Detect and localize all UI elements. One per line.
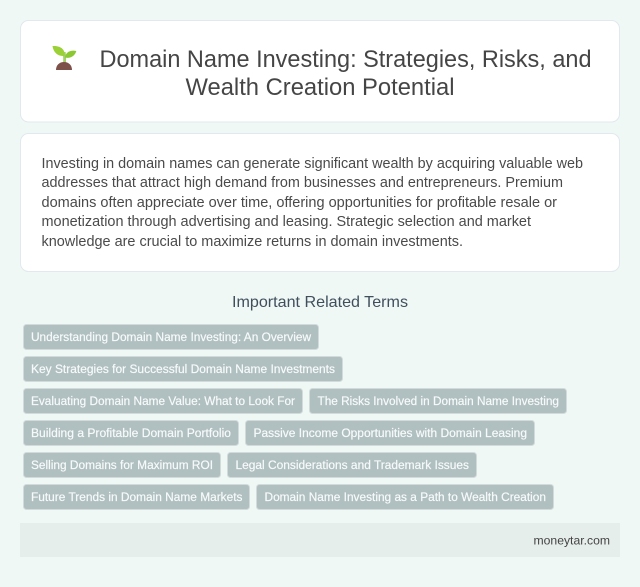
tag: [24, 356, 342, 382]
panel: title card: [20, 20, 620, 122]
tag: [228, 452, 476, 478]
tag list: [24, 324, 566, 510]
tag: Evaluating Domain Name Value: What to Look For: [31, 394, 295, 408]
footer source text: moneytar.com: [534, 534, 610, 548]
tag: Future Trends in Domain Name Markets: [31, 490, 242, 504]
icon: sprout: [52, 46, 76, 70]
tag: Building a Profitable Domain Portfolio: [31, 426, 231, 440]
text block: description: addresses that attract high demand from businesses and entrepreneurs. Premium: [42, 175, 563, 191]
text block: description: domains often appreciate over time, offering opportunities for profitable resale or: [42, 195, 557, 211]
heading: important related terms: Important Related Terms: [232, 294, 408, 311]
tag: [256, 484, 554, 510]
tag: Passive Income Opportunities with Domain Leasing: [254, 426, 527, 440]
tag: Domain Name Investing as a Path to Wealth Creation: [264, 490, 546, 504]
tag: Key Strategies for Successful Domain Name Investments: [31, 362, 335, 376]
tag: Understanding Domain Name Investing: An Overview: [31, 330, 311, 344]
tag: The Risks Involved in Domain Name Investing: [318, 394, 559, 408]
footer bar: [20, 523, 620, 557]
text block: description: knowledge are crucial to maximize returns in domain investments.: [42, 234, 463, 250]
text block: description: [42, 156, 583, 250]
tag: [246, 420, 534, 446]
text block: description: monetization through advertising and leasing. Strategic selection and market: [42, 214, 531, 230]
tag: [24, 452, 220, 478]
tag: Legal Considerations and Trademark Issues: [236, 458, 469, 472]
title: [100, 46, 592, 101]
tag: [310, 388, 566, 414]
title: Wealth Creation Potential: [186, 74, 454, 101]
panel: description card: [20, 134, 620, 272]
tag: [24, 324, 318, 350]
tag: Selling Domains for Maximum ROI: [31, 458, 213, 472]
tag: [24, 388, 302, 414]
text block: description: Investing in domain names can generate significant wealth by acquiring valuable web: [42, 156, 583, 172]
tag: [24, 484, 250, 510]
tag: [24, 420, 238, 446]
title: Domain Name Investing: Strategies, Risks, and: [100, 46, 592, 73]
